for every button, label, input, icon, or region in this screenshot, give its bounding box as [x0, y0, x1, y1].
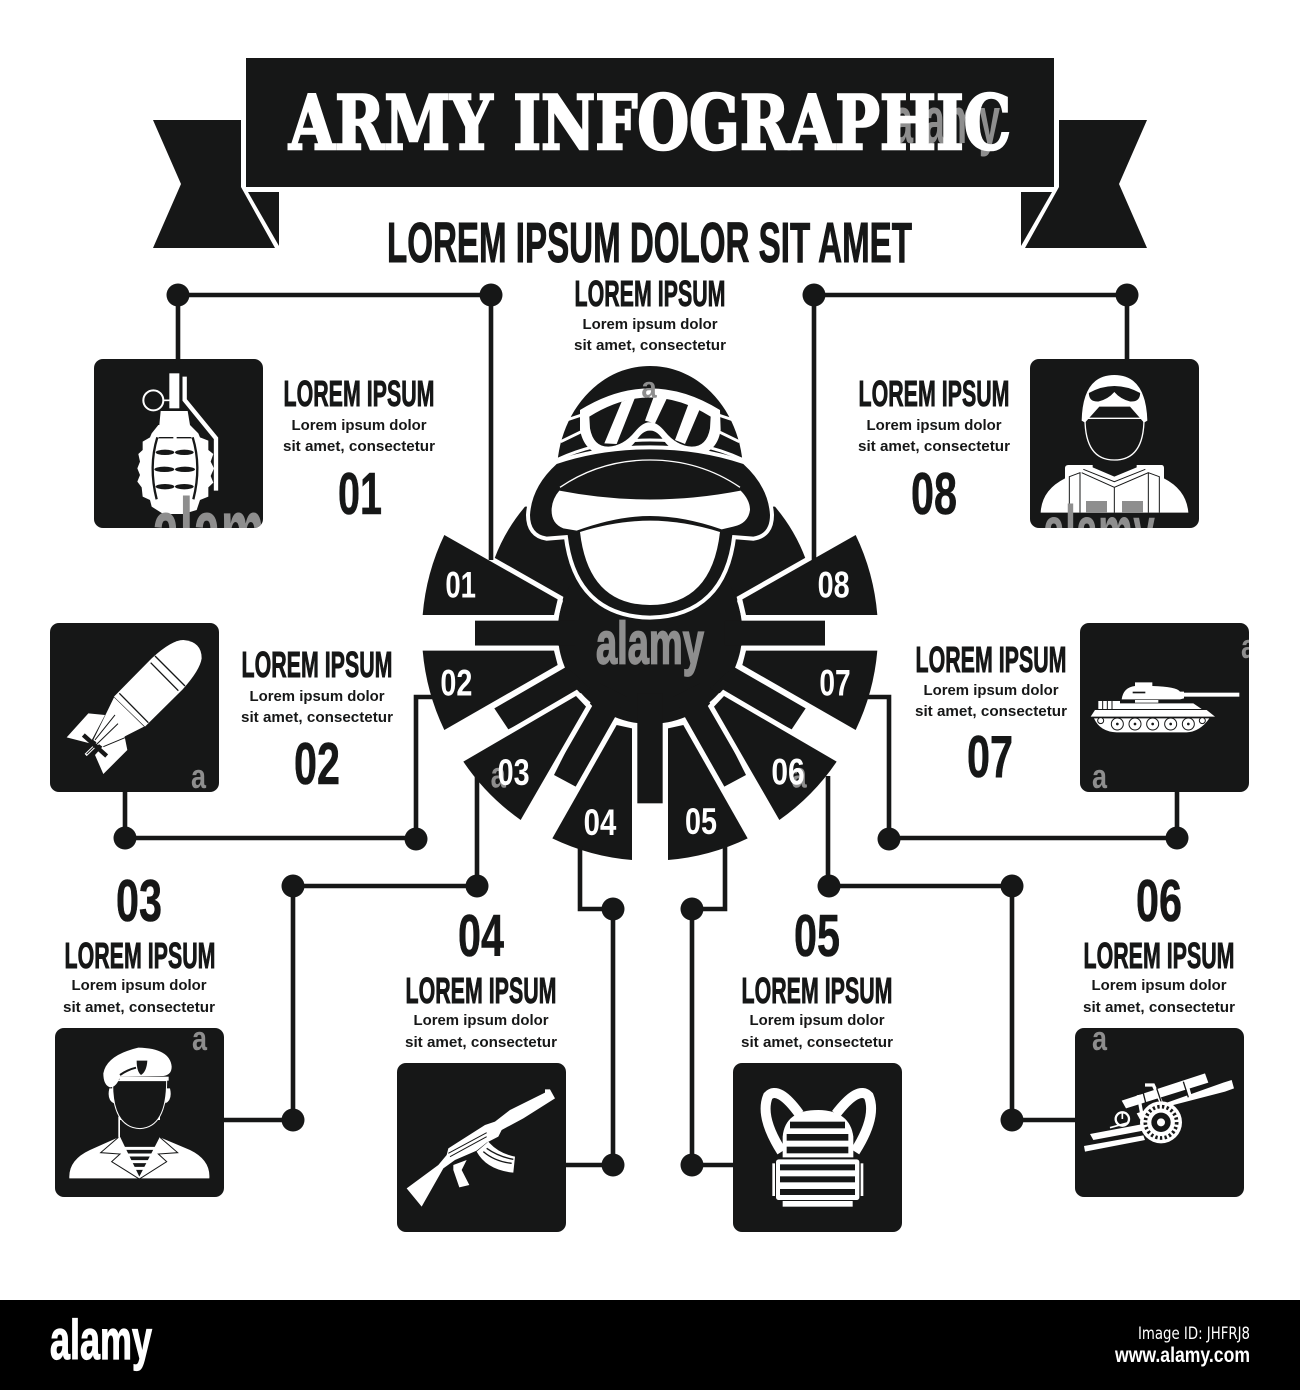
sector numbers: 06 — [771, 750, 805, 792]
text block 08: sit amet, consectetur — [858, 438, 1010, 455]
text block 05: sit amet, consectetur — [741, 1034, 893, 1051]
icon box 01: grenade — [94, 359, 263, 528]
helmet dome — [557, 366, 743, 463]
helmet side stripes — [558, 415, 742, 459]
text block 05: 05 — [794, 903, 840, 969]
sector numbers: 02 — [440, 662, 472, 704]
box 07 watermarks: a — [1092, 758, 1108, 796]
top centre text — [574, 273, 726, 354]
box 01 watermark: alamy — [152, 480, 292, 582]
wheel watermarks: a — [791, 755, 807, 796]
icon: goggled soldier — [1041, 375, 1188, 513]
text block 05: Lorem ipsum dolor — [750, 1012, 885, 1029]
text block 03: Lorem ipsum dolor — [72, 977, 207, 994]
sector 01 — [423, 535, 558, 615]
connectors — [114, 284, 1188, 1176]
text block 02: sit amet, consectetur — [241, 709, 393, 726]
face — [580, 521, 720, 605]
icon box 04: assault rifle — [397, 1063, 566, 1232]
centre watermark: alamy — [596, 609, 704, 676]
icon box 07: tank — [1080, 623, 1257, 796]
box 03 watermark: a — [192, 1020, 208, 1058]
sector numbers: 04 — [584, 801, 617, 843]
sector 07 — [742, 651, 877, 730]
icon: assault rifle — [407, 1089, 555, 1207]
sector numbers: 01 — [445, 563, 476, 605]
text block 07: Lorem ipsum dolor — [924, 682, 1059, 699]
text block 02: 02 — [294, 731, 340, 797]
box 08 watermark: alamy — [1043, 492, 1155, 572]
connector 07 — [866, 697, 1188, 850]
icon: missile — [67, 640, 202, 774]
text block 01: Lorem ipsum dolor — [292, 417, 427, 434]
text block 08 — [858, 373, 1010, 527]
connector 04 — [565, 846, 624, 1176]
connector 03 — [224, 776, 488, 1132]
text block 07: 07 — [967, 724, 1013, 790]
text block 05 — [741, 903, 893, 1051]
text block 06: Lorem ipsum dolor — [1092, 977, 1227, 994]
shoulders — [494, 507, 806, 653]
box 07 watermarks: a — [1241, 628, 1257, 666]
text block 03: 03 — [116, 868, 162, 934]
banner left tail — [153, 120, 275, 248]
footer url: www.alamy.com — [1114, 1344, 1250, 1367]
sector 06 — [714, 696, 837, 820]
text block 01: LOREM IPSUM — [284, 373, 434, 414]
text block 03: LOREM IPSUM — [64, 935, 216, 976]
sector numbers — [440, 563, 851, 843]
helmet brim and chin — [530, 449, 770, 616]
sector 03 — [463, 696, 586, 820]
sector numbers: 05 — [685, 800, 717, 842]
footer image id: Image ID: JHFRJ8 — [1138, 1324, 1250, 1344]
icon: backpack — [766, 1093, 871, 1207]
sector 02 — [423, 651, 558, 730]
icon box 05: backpack — [733, 1063, 902, 1232]
text block 08: LOREM IPSUM — [858, 373, 1010, 414]
text block 01 — [283, 373, 435, 527]
icon: grenade — [137, 373, 216, 514]
title banner — [153, 58, 1147, 248]
footer bar — [0, 1300, 1300, 1390]
banner right tail — [1025, 120, 1147, 248]
title: ARMY INFOGRAPHIC — [288, 79, 1011, 167]
sector 04 — [552, 725, 632, 860]
sector numbers: 07 — [819, 662, 851, 704]
top centre text: Lorem ipsum dolor — [582, 316, 718, 333]
subtitle: LOREM IPSUM DOLOR SIT AMET — [387, 211, 912, 275]
banner main ribbon — [246, 58, 1054, 187]
sector numbers: 03 — [498, 751, 530, 793]
box 07 watermarks — [1092, 640, 1249, 788]
text block 04: sit amet, consectetur — [405, 1034, 557, 1051]
visor highlight — [560, 460, 740, 487]
text block 01: 01 — [338, 461, 382, 527]
text block 07 — [915, 639, 1067, 790]
sector 08 — [742, 535, 877, 615]
text block 08: Lorem ipsum dolor — [866, 417, 1002, 434]
text block 04: 04 — [458, 903, 504, 969]
text block 01: sit amet, consectetur — [283, 438, 435, 455]
text block 04: LOREM IPSUM — [406, 970, 556, 1011]
top centre text: sit amet, consectetur — [574, 337, 726, 354]
icon: field cannon — [1084, 1073, 1234, 1152]
text block 03 — [63, 868, 216, 1016]
centre disc — [558, 539, 742, 724]
icon: beret soldier — [69, 1048, 209, 1179]
box 02 watermark: a — [191, 758, 207, 796]
icon box 02: missile — [50, 623, 219, 796]
watermark on banner: alamy — [892, 83, 1000, 157]
connector 08 — [802, 284, 1138, 560]
white headband — [552, 491, 750, 531]
footer logo: alamy — [50, 1308, 152, 1371]
text block 06: sit amet, consectetur — [1083, 999, 1235, 1016]
connector 06 — [818, 776, 1075, 1132]
connector 02 — [114, 697, 434, 850]
icon: tank — [1091, 682, 1239, 732]
banner right fold — [1021, 192, 1052, 246]
spokes — [475, 621, 825, 803]
text block 03: sit amet, consectetur — [63, 999, 215, 1016]
banner left fold — [248, 192, 279, 246]
icon box 06: field cannon — [1075, 1020, 1244, 1197]
goggles — [580, 388, 721, 456]
wheel watermarks: a — [491, 755, 506, 796]
text block 04 — [405, 903, 557, 1051]
wheel watermarks: a — [641, 372, 657, 405]
text block 02: LOREM IPSUM — [242, 644, 392, 685]
text block 07: LOREM IPSUM — [916, 639, 1066, 680]
wheel watermarks — [491, 372, 807, 796]
sector numbers: 08 — [818, 563, 850, 605]
box 06 watermark: a — [1092, 1020, 1108, 1058]
text block 02 — [241, 644, 393, 797]
sector 05 — [668, 725, 748, 860]
text block 08: 08 — [911, 461, 957, 527]
text block 06: 06 — [1136, 868, 1182, 934]
text block 07: sit amet, consectetur — [915, 703, 1067, 720]
icon box 03: beret soldier — [55, 1020, 224, 1197]
top centre text: LOREM IPSUM — [574, 273, 726, 314]
text block 05: LOREM IPSUM — [742, 970, 892, 1011]
central soldier wheel — [423, 366, 877, 860]
icon box 08: soldier with goggles — [1030, 359, 1199, 528]
connector 05 — [680, 846, 733, 1176]
text block 06 — [1083, 868, 1235, 1016]
connector 01 — [166, 284, 502, 560]
text block 02: Lorem ipsum dolor — [250, 688, 385, 705]
box 08 pocket marks — [1086, 501, 1143, 513]
text block 04: Lorem ipsum dolor — [414, 1012, 549, 1029]
